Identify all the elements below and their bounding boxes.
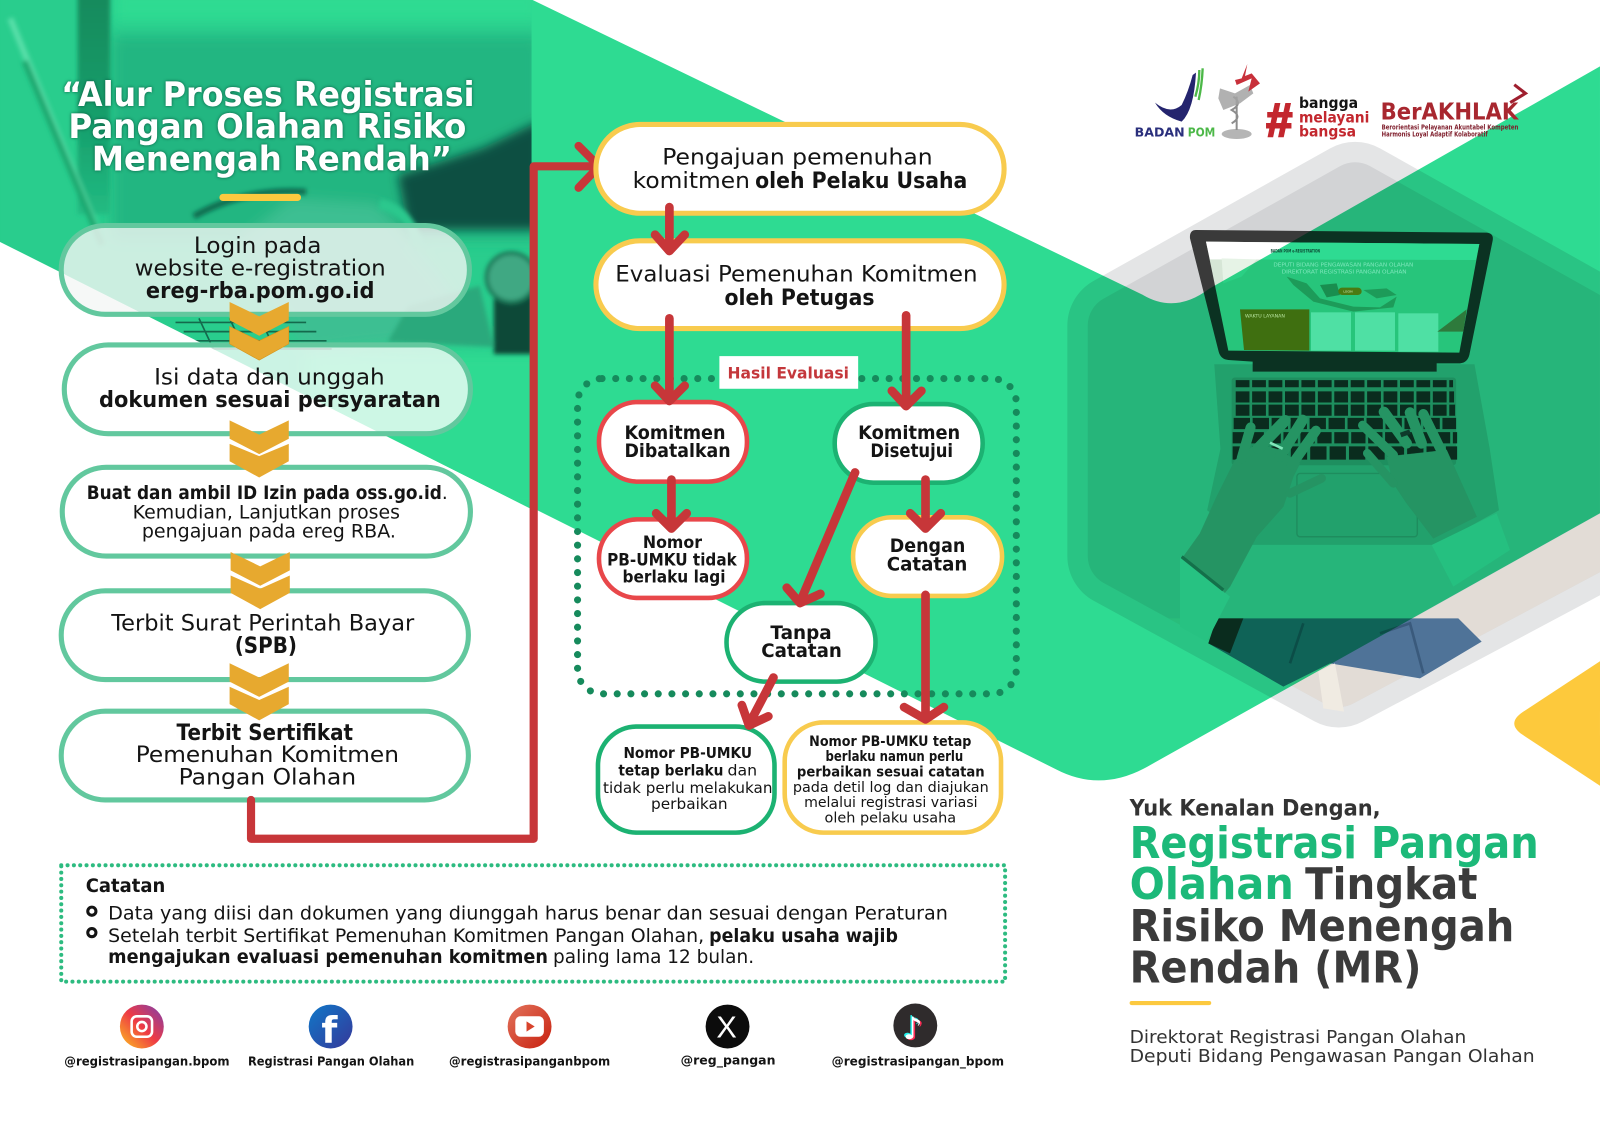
right heading: [1129, 796, 1539, 994]
logo: bangga melayani bangsa: [1266, 94, 1369, 147]
gold chevrons between steps: [230, 302, 290, 720]
step 1 box: Login pada: [194, 233, 321, 259]
laptop screen content: LOGIN: [1343, 290, 1353, 294]
label: hasil evaluasi: [719, 356, 858, 389]
box: nomor PB-UMKU tetap berlaku: tetap berlaku: [618, 762, 723, 779]
connector arrow from step 5 to submission: [251, 146, 599, 839]
right heading: Risiko Menengah: [1130, 901, 1514, 952]
box: nomor PB-UMKU perlu perbaikan: pada detil log dan diajukan: [793, 780, 989, 796]
laptop screen content: WAKTU LAYANAN: [1245, 313, 1285, 318]
step 5 box: Pangan Olahan: [179, 765, 356, 791]
box: evaluasi pemenuhan komitmen: [596, 241, 1004, 329]
laptop screen content: DIREKTORAT REGISTRASI PANGAN OLAHAN: [1282, 270, 1407, 276]
step 5 box: Pemenuhan Komitmen: [136, 742, 399, 768]
logo: Badan POM: POM: [1188, 126, 1215, 140]
social: X: @reg_pangan: [681, 1053, 776, 1068]
notes box: mengajukan evaluasi pemenuhan komitmen: [108, 947, 548, 968]
right heading: Rendah (MR): [1130, 943, 1421, 994]
social: facebook: [248, 1005, 414, 1069]
title: Pangan Olahan Risiko: [68, 107, 466, 146]
step 4 box: (SPB): [235, 633, 297, 659]
social: tiktok: @registrasipangan_bpom: [832, 1054, 1004, 1069]
notes box: Setelah terbit Sertifikat Pemenuhan Komitmen Pangan Olahan,: [108, 926, 704, 947]
box: tanpa catatan: [727, 603, 876, 682]
right heading: Registrasi Pangan: [1130, 818, 1539, 869]
social: X: [681, 1005, 776, 1068]
social: youtube: @registrasipanganbpom: [449, 1054, 610, 1069]
logo: Badan POM: BADAN: [1135, 126, 1185, 140]
box: nomor PB-UMKU tetap berlaku: dan: [728, 762, 757, 779]
box: dengan catatan: Dengan: [890, 535, 965, 557]
hands and sleeves: [1180, 412, 1510, 642]
social: youtube: [449, 1005, 610, 1069]
laptop base and keyboard: [1207, 364, 1499, 545]
box: nomor PB-UMKU perlu perbaikan: melalui registrasi variasi: [804, 795, 978, 811]
logo: bangga melayani bangsa: bangsa: [1299, 123, 1356, 141]
box: nomor PB-UMKU tetap berlaku: [598, 727, 774, 833]
logo: bangga melayani bangsa: melayani: [1299, 108, 1369, 126]
box: tanpa catatan: Catatan: [761, 640, 842, 662]
box: nomor PB-UMKU tetap berlaku: Nomor PB-UMKU: [623, 745, 752, 762]
social: X: X: [716, 1011, 737, 1045]
box: komitmen dibatalkan: Dibatalkan: [624, 440, 731, 462]
box: nomor PB-UMKU perlu perbaikan: [785, 722, 1001, 833]
social: instagram: [64, 1005, 230, 1069]
step 3 box: [62, 467, 470, 556]
step 2 box: Isi data dan unggah: [154, 365, 385, 391]
step 4 box: [61, 591, 468, 680]
flow arrows: [655, 207, 944, 725]
step 3 box: Kemudian, Lanjutkan proses: [133, 502, 400, 523]
dotted group: hasil evaluasi: [578, 379, 1016, 694]
notes box: paling lama 12 bulan.: [553, 947, 754, 968]
box: nomor PB-UMKU perlu perbaikan: oleh pelaku usaha: [824, 810, 956, 826]
right heading: Yuk Kenalan Dengan,: [1129, 796, 1381, 821]
box: komitmen disetujui: [835, 404, 983, 483]
social: tiktok: ♪: [902, 1011, 921, 1046]
social: tiktok: [832, 1004, 1004, 1069]
box: evaluasi pemenuhan komitmen: Evaluasi Pemenuhan Komitmen: [615, 262, 978, 288]
logo: Badan POM: [1135, 68, 1215, 140]
box: dengan catatan: [853, 517, 1002, 596]
box: nomor PB-UMKU perlu perbaikan: berlaku namun perlu: [826, 749, 963, 765]
laptop screen content: [1240, 248, 1467, 352]
step 2 box: [64, 345, 470, 434]
step 5 box: [61, 711, 468, 800]
box: nomor PB-UMKU tidak berlaku: berlaku lagi: [622, 567, 726, 587]
box: pengajuan pemenuhan komitmen: komitmen: [633, 168, 750, 194]
step 3 box: .: [442, 483, 448, 504]
box: komitmen disetujui: Disetujui: [870, 440, 953, 462]
social: facebook: f: [321, 1009, 338, 1052]
box: nomor PB-UMKU tidak berlaku: PB-UMKU tidak: [607, 549, 737, 569]
step 1 box: website e-registration: [135, 256, 386, 282]
laptop screen content: BADAN POM e-REGISTRATION: [1271, 248, 1320, 253]
step 3 box: pengajuan pada ereg RBA.: [142, 522, 396, 543]
box: komitmen disetujui: Komitmen: [858, 422, 960, 444]
hexagon photo backdrop: [1118, 193, 1592, 677]
logo: BerAKHLAK: BerAKHLAK: [1381, 97, 1519, 125]
logo: bangga melayani bangsa: bangga: [1299, 94, 1358, 112]
box: nomor PB-UMKU tetap berlaku: perbaikan: [651, 796, 728, 813]
notes box: Catatan: [86, 876, 165, 897]
box: nomor PB-UMKU perlu perbaikan: Nomor PB-UMKU tetap: [809, 734, 972, 750]
social: facebook: Registrasi Pangan Olahan: [248, 1054, 414, 1069]
step 3 box: Buat dan ambil ID Izin pada oss.go.id: [87, 483, 442, 504]
step 1 box: [61, 226, 469, 314]
department text: Direktorat Registrasi Pangan Olahan: [1130, 1028, 1466, 1048]
laptop screen content: DEPUTI BIDANG PENGAWASAN PANGAN OLAHAN: [1273, 263, 1414, 269]
department text: Deputi Bidang Pengawasan Pangan Olahan: [1130, 1047, 1535, 1067]
heading underline: [1130, 1001, 1211, 1005]
box: nomor PB-UMKU tidak berlaku: [599, 519, 747, 598]
logo: emblem: [1218, 64, 1260, 139]
box: komitmen dibatalkan: Komitmen: [624, 422, 726, 444]
box: nomor PB-UMKU tetap berlaku: tidak perlu melakukan: [603, 780, 772, 797]
step 4 box: Terbit Surat Perintah Bayar: [110, 611, 415, 637]
box: pengajuan pemenuhan komitmen: Pengajuan pemenuhan: [662, 144, 933, 170]
step 1 box: ereg-rba.pom.go.id: [146, 278, 374, 304]
step 2 box: dokumen sesuai persyaratan: [99, 387, 441, 413]
box: dengan catatan: Catatan: [887, 553, 967, 575]
logo: BerAKHLAK: Harmonis Loyal Adaptif Kolaboratif: [1382, 131, 1488, 139]
notes box: [61, 865, 1005, 982]
right heading: Olahan: [1130, 859, 1294, 910]
box: pengajuan pemenuhan komitmen: [596, 124, 1004, 213]
social: instagram: @registrasipangan.bpom: [64, 1054, 230, 1069]
title: “Alur Proses Registrasi: [61, 75, 474, 114]
right heading: Tingkat: [1305, 859, 1478, 910]
title: [61, 75, 474, 178]
logo: BerAKHLAK: Berorientasi Pelayanan Akuntabel Kompeten: [1382, 124, 1519, 132]
label: hasil evaluasi: Hasil Evaluasi: [728, 364, 849, 383]
box: komitmen dibatalkan: [599, 402, 747, 482]
title: Menengah Rendah”: [92, 139, 452, 178]
box: nomor PB-UMKU tidak berlaku: Nomor: [643, 532, 703, 552]
department text: [1130, 1028, 1535, 1067]
box: evaluasi pemenuhan komitmen: oleh Petugas: [724, 285, 874, 311]
box: tanpa catatan: Tanpa: [770, 622, 832, 644]
jeans and shirt: [1208, 618, 1482, 712]
left header photo panel: [0, 0, 551, 520]
yellow corner shape: [1514, 661, 1600, 786]
box: nomor PB-UMKU perlu perbaikan: perbaikan sesuai catatan: [797, 765, 985, 781]
laptop screen: [1190, 230, 1493, 372]
step 5 box: Terbit Sertifikat: [177, 720, 353, 746]
notes box: Data yang diisi dan dokumen yang diunggah harus benar dan sesuai dengan Peraturan: [108, 903, 948, 924]
green diagonal background: [0, 0, 1600, 780]
logo: BerAKHLAK: [1381, 85, 1525, 139]
title underline: [219, 194, 301, 201]
notes box: pelaku usaha wajib: [709, 926, 898, 947]
social: tiktok: ♪: [903, 1012, 923, 1047]
box: pengajuan pemenuhan komitmen: oleh Pelaku Usaha: [755, 168, 967, 194]
social: tiktok: ♪: [905, 1013, 924, 1048]
logo: bangga melayani bangsa: #: [1266, 95, 1292, 147]
